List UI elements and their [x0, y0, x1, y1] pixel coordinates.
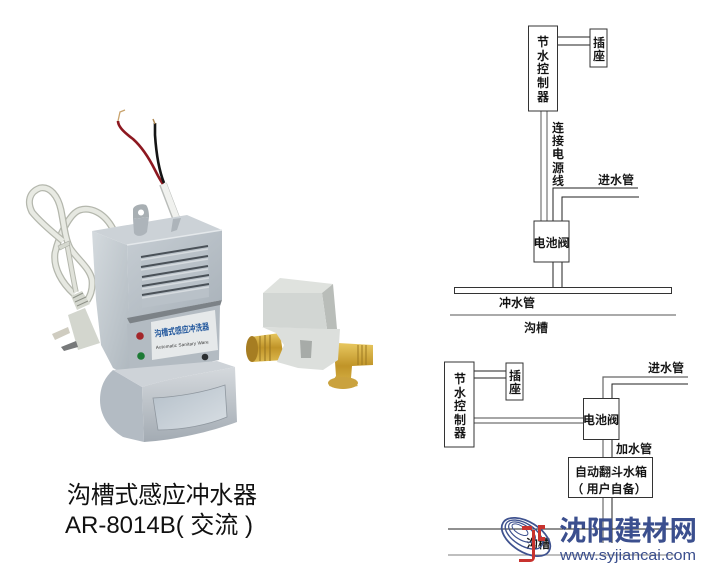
power cable to valve: [541, 111, 547, 221]
valve slot: [300, 340, 312, 358]
outlet pipe: [553, 262, 562, 287]
label: power connection cable: 连: [552, 120, 564, 135]
housing top face: [92, 215, 222, 245]
white product label: 沟槽式感应冲洗器: [154, 320, 210, 339]
box: water-saving controller: 制: [454, 413, 466, 427]
box: battery valve: 电池阀: [533, 235, 570, 250]
box: socket: 座: [509, 381, 521, 396]
label: power connection cable: 线: [552, 173, 564, 188]
icon: blue swirl: [495, 510, 557, 564]
box: water-saving controller: [528, 26, 558, 111]
lower gutter line: [448, 554, 676, 556]
icon: cable with red and black wires: [118, 110, 176, 218]
valve base: [262, 327, 340, 370]
box: battery valve: [533, 221, 570, 262]
product name caption: 沟槽式感应冲水器: [67, 482, 257, 509]
box: water-saving controller: 制: [537, 76, 549, 90]
icon: mounting bracket: [133, 204, 149, 219]
label: power connection cable: 源: [552, 161, 564, 175]
box: battery valve: 电池阀: [583, 412, 619, 427]
wiring diagram: top installation: [450, 26, 676, 335]
feed pipe second wall: [611, 439, 613, 543]
label: power connection cable: 接: [552, 133, 564, 148]
label: inlet pipe: 进水管: [598, 172, 634, 187]
sensor lens: [153, 385, 227, 430]
box: socket: [506, 363, 523, 400]
valve cap front: [263, 293, 327, 329]
power cable to valve: [474, 418, 583, 423]
box: water-saving controller: 器: [537, 90, 549, 104]
box: socket: 插: [593, 36, 605, 50]
housing left face: [92, 231, 131, 378]
white product label: Automatic Sanitary Ware: [156, 339, 209, 350]
black sensor dot: [202, 354, 208, 360]
flush pipe bar: [454, 288, 672, 294]
second inlet wall: [612, 384, 688, 398]
label: flush pipe: 冲水管: [499, 295, 535, 310]
sensor base front frame: [142, 367, 237, 442]
red indicator LED: [136, 332, 144, 340]
box: socket: [590, 29, 607, 67]
dark groove: [127, 300, 222, 324]
product name caption: AR-8014B( 交流 ): [65, 512, 253, 539]
wiring diagram: bottom installation: [444, 360, 688, 555]
box: water-saving controller: 节: [537, 35, 549, 49]
front face bevel highlight: [127, 230, 222, 245]
product name caption: [65, 482, 257, 539]
label: inlet pipe: 进水管: [648, 360, 684, 375]
green indicator LED: [137, 352, 145, 360]
watermark URL: www.syjiancai.com: [559, 547, 696, 564]
icon: power cord with plug: [29, 188, 113, 351]
product photo: sensor flush device: [29, 110, 237, 442]
box: socket: 座: [593, 48, 605, 63]
sensor base left side: [100, 370, 144, 442]
box: water-saving controller: 水: [537, 48, 549, 63]
sensor base top: [113, 361, 235, 387]
box: water-saving controller: [444, 362, 474, 447]
box: automatic tipping tank: [568, 458, 652, 498]
reflections on top face: [133, 217, 181, 236]
icon: red JC mark: [519, 525, 545, 562]
watermark logo: [495, 510, 697, 564]
valve cap top: [263, 278, 333, 293]
louvre vent: [141, 246, 209, 308]
feed pipe: [602, 439, 604, 543]
housing front face: [127, 230, 222, 318]
gutter lines: [448, 528, 676, 530]
watermark name: 沈阳建材网: [559, 515, 697, 546]
connection wires to socket: [557, 37, 590, 45]
inlet pipe: [603, 377, 688, 398]
label: power connection cable: 电: [552, 147, 564, 161]
connection wires to socket: [474, 371, 506, 378]
box: battery valve: [583, 398, 619, 440]
white product label: [151, 310, 218, 360]
box: water-saving controller: 器: [454, 426, 466, 440]
box: automatic tipping tank: （ 用户自备）: [571, 481, 647, 496]
box: water-saving controller: 控: [454, 398, 466, 413]
box: automatic tipping tank: 自动翻斗水箱: [575, 464, 647, 479]
brass inlet thread: [246, 333, 284, 362]
label: gutter: 沟槽: [526, 536, 550, 551]
control panel: [127, 305, 220, 378]
valve cap side: [322, 284, 337, 329]
box: water-saving controller: 水: [454, 385, 466, 400]
label: gutter: 沟槽: [524, 320, 548, 335]
box: socket: 插: [509, 369, 521, 383]
label: fill pipe: 加水管: [616, 441, 652, 456]
brass tee outlet: [328, 343, 373, 389]
gutter line: [450, 314, 676, 316]
inlet pipe: [553, 188, 639, 221]
product photo: solenoid valve: [246, 278, 373, 389]
box: water-saving controller: 节: [454, 372, 466, 386]
box: water-saving controller: 控: [537, 61, 549, 76]
